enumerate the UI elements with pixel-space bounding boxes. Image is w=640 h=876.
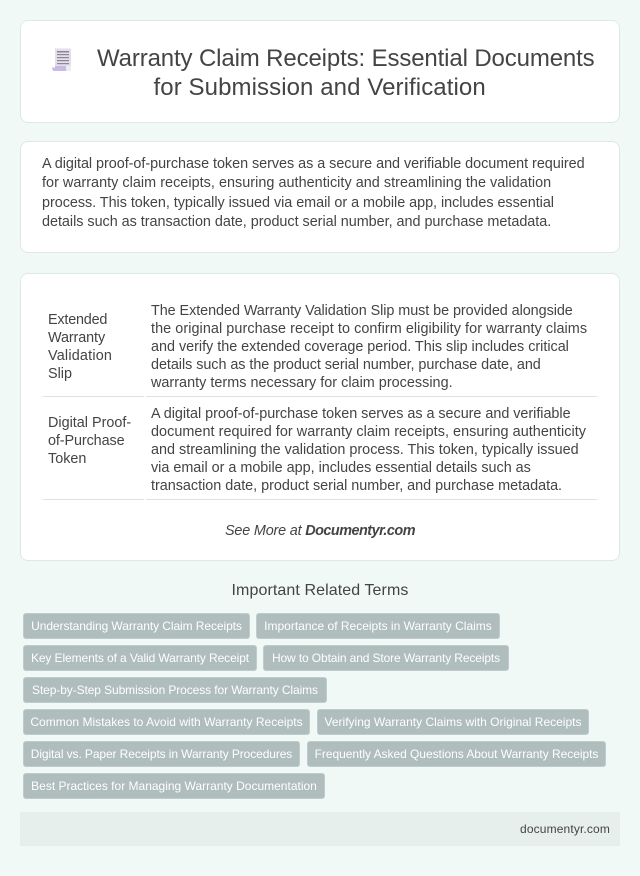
title: for Submission and Verification — [154, 74, 486, 101]
row 1 text: and verify the extended coverage period. This slip includes critical — [151, 339, 569, 355]
related terms tags: Common Mistakes to Avoid with Warranty Receipts — [30, 715, 303, 729]
row 1 label — [48, 312, 112, 382]
footer text: documentyr.com — [520, 822, 610, 836]
header card — [20, 20, 620, 123]
intro text: for warranty claim receipts, ensuring authenticity and streamlining the validation — [42, 175, 551, 191]
see more link: See More at Documentyr.com — [225, 523, 415, 539]
row 2 text — [151, 406, 586, 494]
row 1 text: The Extended Warranty Validation Slip must be provided alongside — [151, 303, 573, 319]
row 2 label: Digital Proof- — [48, 415, 131, 431]
row 2 text: A digital proof-of-purchase token serves as a secure and verifiable — [151, 406, 571, 422]
intro text: A digital proof-of-purchase token serves as a secure and verifiable document required — [42, 156, 585, 172]
row 2 text: via email or a mobile app, includes essential details such as — [151, 460, 531, 476]
related terms tags: How to Obtain and Store Warranty Receipts — [272, 651, 500, 665]
row 2 label: Token — [48, 451, 86, 467]
footer bar — [20, 812, 620, 846]
title: Warranty Claim Receipts: Essential Documents — [97, 45, 595, 72]
related terms tags: Understanding Warranty Claim Receipts — [31, 619, 242, 633]
row 2 text: document required for warranty claim receipts, ensuring authenticity — [151, 424, 586, 440]
related terms tags: Frequently Asked Questions About Warranty Receipts — [315, 747, 598, 761]
related terms tags: Verifying Warranty Claims with Original Receipts — [325, 715, 581, 729]
intro text — [42, 156, 585, 230]
intro text: details such as transaction date, product serial number, and purchase metadata. — [42, 214, 551, 230]
intro card — [20, 141, 620, 253]
title — [97, 45, 595, 101]
row 1 text: warranty terms necessary for claim processing. — [151, 375, 453, 391]
row 1 label: Extended — [48, 312, 107, 328]
related terms tags: Key Elements of a Valid Warranty Receipt — [31, 651, 249, 665]
related terms tags — [23, 613, 606, 799]
row 1 text: details such as the product serial number, purchase date, and — [151, 357, 541, 373]
related terms heading: Important Related Terms — [232, 582, 408, 599]
row 1 label: Slip — [48, 366, 72, 382]
intro text: process. This token, typically issued via email or a mobile app, includes essential — [42, 195, 554, 211]
related terms tags: Step-by-Step Submission Process for Warranty Claims — [32, 683, 318, 697]
related terms tags: Best Practices for Managing Warranty Documentation — [31, 779, 317, 793]
row 1 text: the original purchase receipt to confirm eligibility for warranty claims — [151, 321, 587, 337]
row 1 text — [151, 303, 587, 391]
row 1 label: Validation — [48, 348, 112, 364]
details card — [20, 273, 620, 561]
row 2 label — [48, 415, 131, 467]
icon: receipt — [52, 48, 71, 71]
row 2 text: transaction date, product serial number, and purchase metadata. — [151, 478, 562, 494]
row 1 label: Warranty — [48, 330, 105, 346]
row 2 text: and streamlining the validation process. This token, typically issued — [151, 442, 579, 458]
related terms tags: Digital vs. Paper Receipts in Warranty Procedures — [31, 747, 292, 761]
related terms tags: Importance of Receipts in Warranty Claims — [264, 619, 492, 633]
row 2 label: of-Purchase — [48, 433, 124, 449]
